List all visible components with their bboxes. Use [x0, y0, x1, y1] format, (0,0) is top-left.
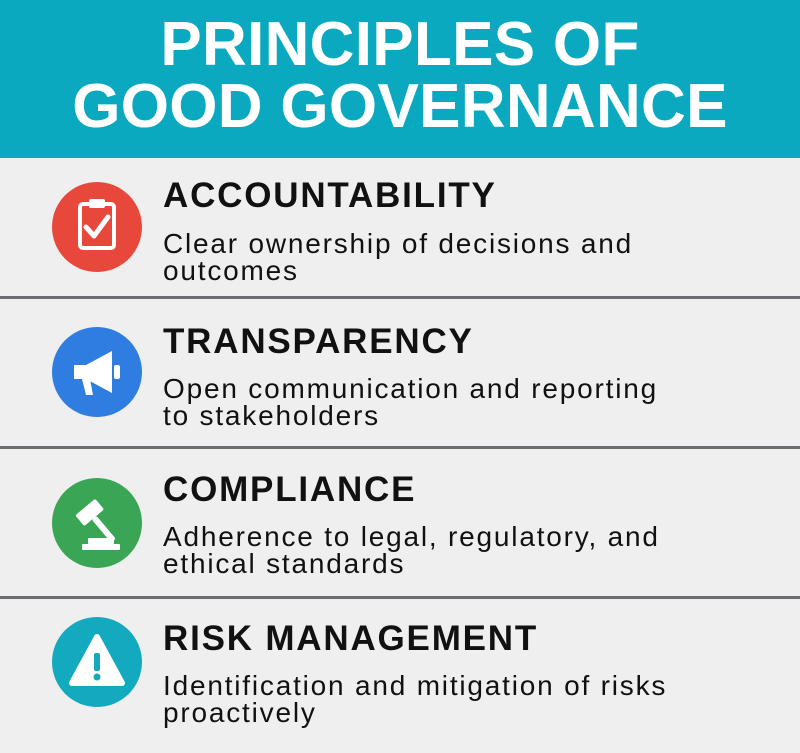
description: Open communication and reporting: [163, 373, 658, 404]
description: Adherence to legal, regulatory, and: [163, 521, 660, 552]
heading: ACCOUNTABILITY: [163, 176, 497, 215]
description: [163, 228, 633, 286]
panel: compliance: [52, 470, 660, 579]
panel: risk management: [52, 617, 667, 728]
icon: clipboard check: [52, 182, 142, 272]
description: to stakeholders: [163, 400, 380, 431]
title: PRINCIPLES OF: [160, 10, 640, 79]
icon: gavel: [52, 478, 142, 568]
heading: TRANSPARENCY: [163, 322, 474, 361]
icon: megaphone: [52, 327, 142, 417]
description: outcomes: [163, 255, 299, 286]
header banner: [0, 0, 800, 158]
description: Clear ownership of decisions and: [163, 228, 633, 259]
description: ethical standards: [163, 548, 405, 579]
description: [163, 521, 660, 579]
title: GOOD GOVERNANCE: [72, 72, 728, 141]
description: [163, 373, 658, 431]
heading: COMPLIANCE: [163, 470, 416, 509]
description: Identification and mitigation of risks: [163, 670, 667, 701]
panel: transparency: [52, 322, 658, 431]
description: [163, 670, 667, 728]
icon: warning triangle: [52, 617, 142, 707]
description: proactively: [163, 697, 317, 728]
panel: accountability: [52, 176, 633, 286]
title: [72, 10, 728, 141]
heading: RISK MANAGEMENT: [163, 619, 538, 658]
